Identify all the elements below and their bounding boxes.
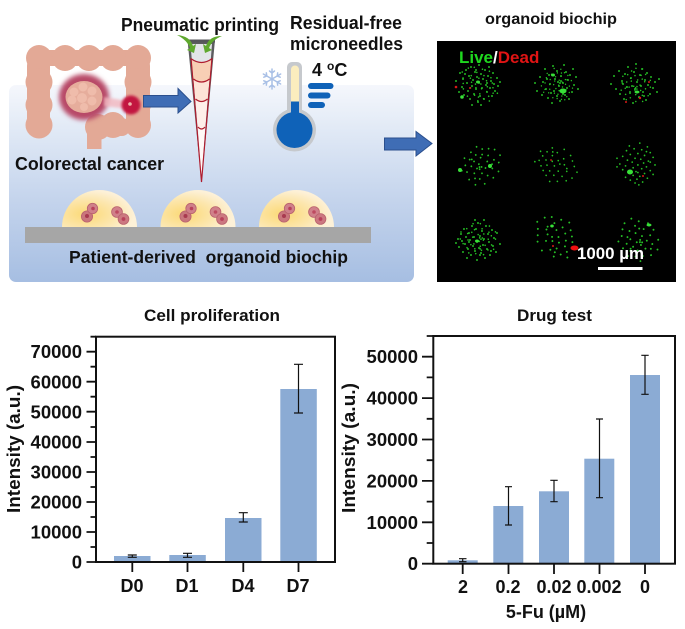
dead cells (455, 81, 650, 250)
panel: live dead micrograph (437, 41, 676, 282)
x tick labels: 0.2 (495, 577, 521, 597)
panel: workflow background (9, 85, 414, 282)
heading: residual-free microneedles: microneedles (290, 34, 403, 54)
y tick labels: 40000 (31, 432, 82, 452)
icon: snowflake (262, 69, 282, 89)
chart: cell proliferation (3, 307, 335, 596)
icon: colon (26, 45, 152, 149)
label: live dead: Live/Dead (459, 48, 539, 67)
y tick labels: 30000 (31, 462, 82, 482)
y tick labels: 0 (408, 553, 418, 574)
y tick labels: 20000 (367, 470, 418, 492)
x tick labels: D0 (120, 576, 144, 596)
x tick labels: 0 (640, 577, 650, 597)
y tick labels: 50000 (367, 346, 418, 367)
y tick labels: 50000 (31, 402, 82, 422)
heading: organoid biochip: organoid biochip (485, 11, 617, 28)
arrow: colon to needle (144, 88, 191, 113)
bars (448, 375, 660, 564)
y axis title: Intensity (a.u.) (3, 385, 24, 513)
scale bar (598, 267, 642, 270)
y tick labels: 20000 (31, 492, 82, 512)
heading: residual-free microneedles (290, 13, 403, 54)
label: colorectal cancer: Colorectal cancer (15, 154, 164, 174)
heading: pneumatic printing: Pneumatic printing (121, 15, 279, 35)
y tick labels (367, 346, 418, 574)
label: temperature: C (334, 60, 347, 80)
icon: green air arrows (177, 35, 222, 53)
heading: residual-free microneedles: Residual-free (290, 13, 402, 33)
y tick labels: 30000 (367, 429, 418, 450)
arrow: workflow to image (384, 132, 432, 156)
x tick labels: D1 (175, 576, 199, 596)
x tick labels: 0.002 (576, 577, 622, 597)
bright spots (458, 74, 652, 242)
label: biochip: Patient-derived organoid biochip (69, 247, 348, 267)
icon: thermometer (273, 62, 316, 152)
error bars (128, 364, 303, 557)
icon: cold lines (308, 83, 334, 108)
biochip substrate (25, 227, 371, 243)
x tick labels (120, 576, 310, 596)
error bars (459, 355, 649, 562)
y tick labels: 10000 (31, 522, 82, 542)
y tick labels: 70000 (31, 341, 82, 362)
ticks (422, 336, 645, 574)
y axis title: Intensity (a.u.) (338, 383, 359, 513)
x axis title: 5-Fu (µM) (506, 602, 586, 622)
axes frame (433, 336, 675, 564)
organoid domes (62, 190, 334, 227)
x tick labels (458, 577, 650, 597)
ticks (86, 337, 298, 572)
x tick labels: D7 (286, 576, 310, 596)
x tick labels: 2 (458, 577, 468, 597)
label: temperature: 4 (312, 60, 322, 80)
icon: metastatic spot (104, 96, 140, 114)
y tick labels: 0 (72, 552, 82, 572)
green cell clusters (453, 58, 663, 267)
y tick labels: 10000 (367, 512, 418, 533)
scale label: 1000 µm (577, 244, 644, 263)
x tick labels: D4 (231, 576, 255, 596)
chart: drug test (338, 307, 675, 622)
axes frame (96, 337, 335, 562)
label: temperature: o (327, 59, 334, 73)
icon: printing needle (177, 35, 222, 183)
heading: Cell proliferation (144, 307, 280, 325)
heading: Drug test (517, 307, 593, 325)
y tick labels: 40000 (367, 388, 418, 408)
y tick labels (31, 341, 82, 572)
y tick labels: 60000 (31, 372, 82, 392)
x tick labels: 0.02 (536, 577, 572, 597)
icon: primary tumor (59, 74, 109, 120)
bars (114, 389, 317, 562)
